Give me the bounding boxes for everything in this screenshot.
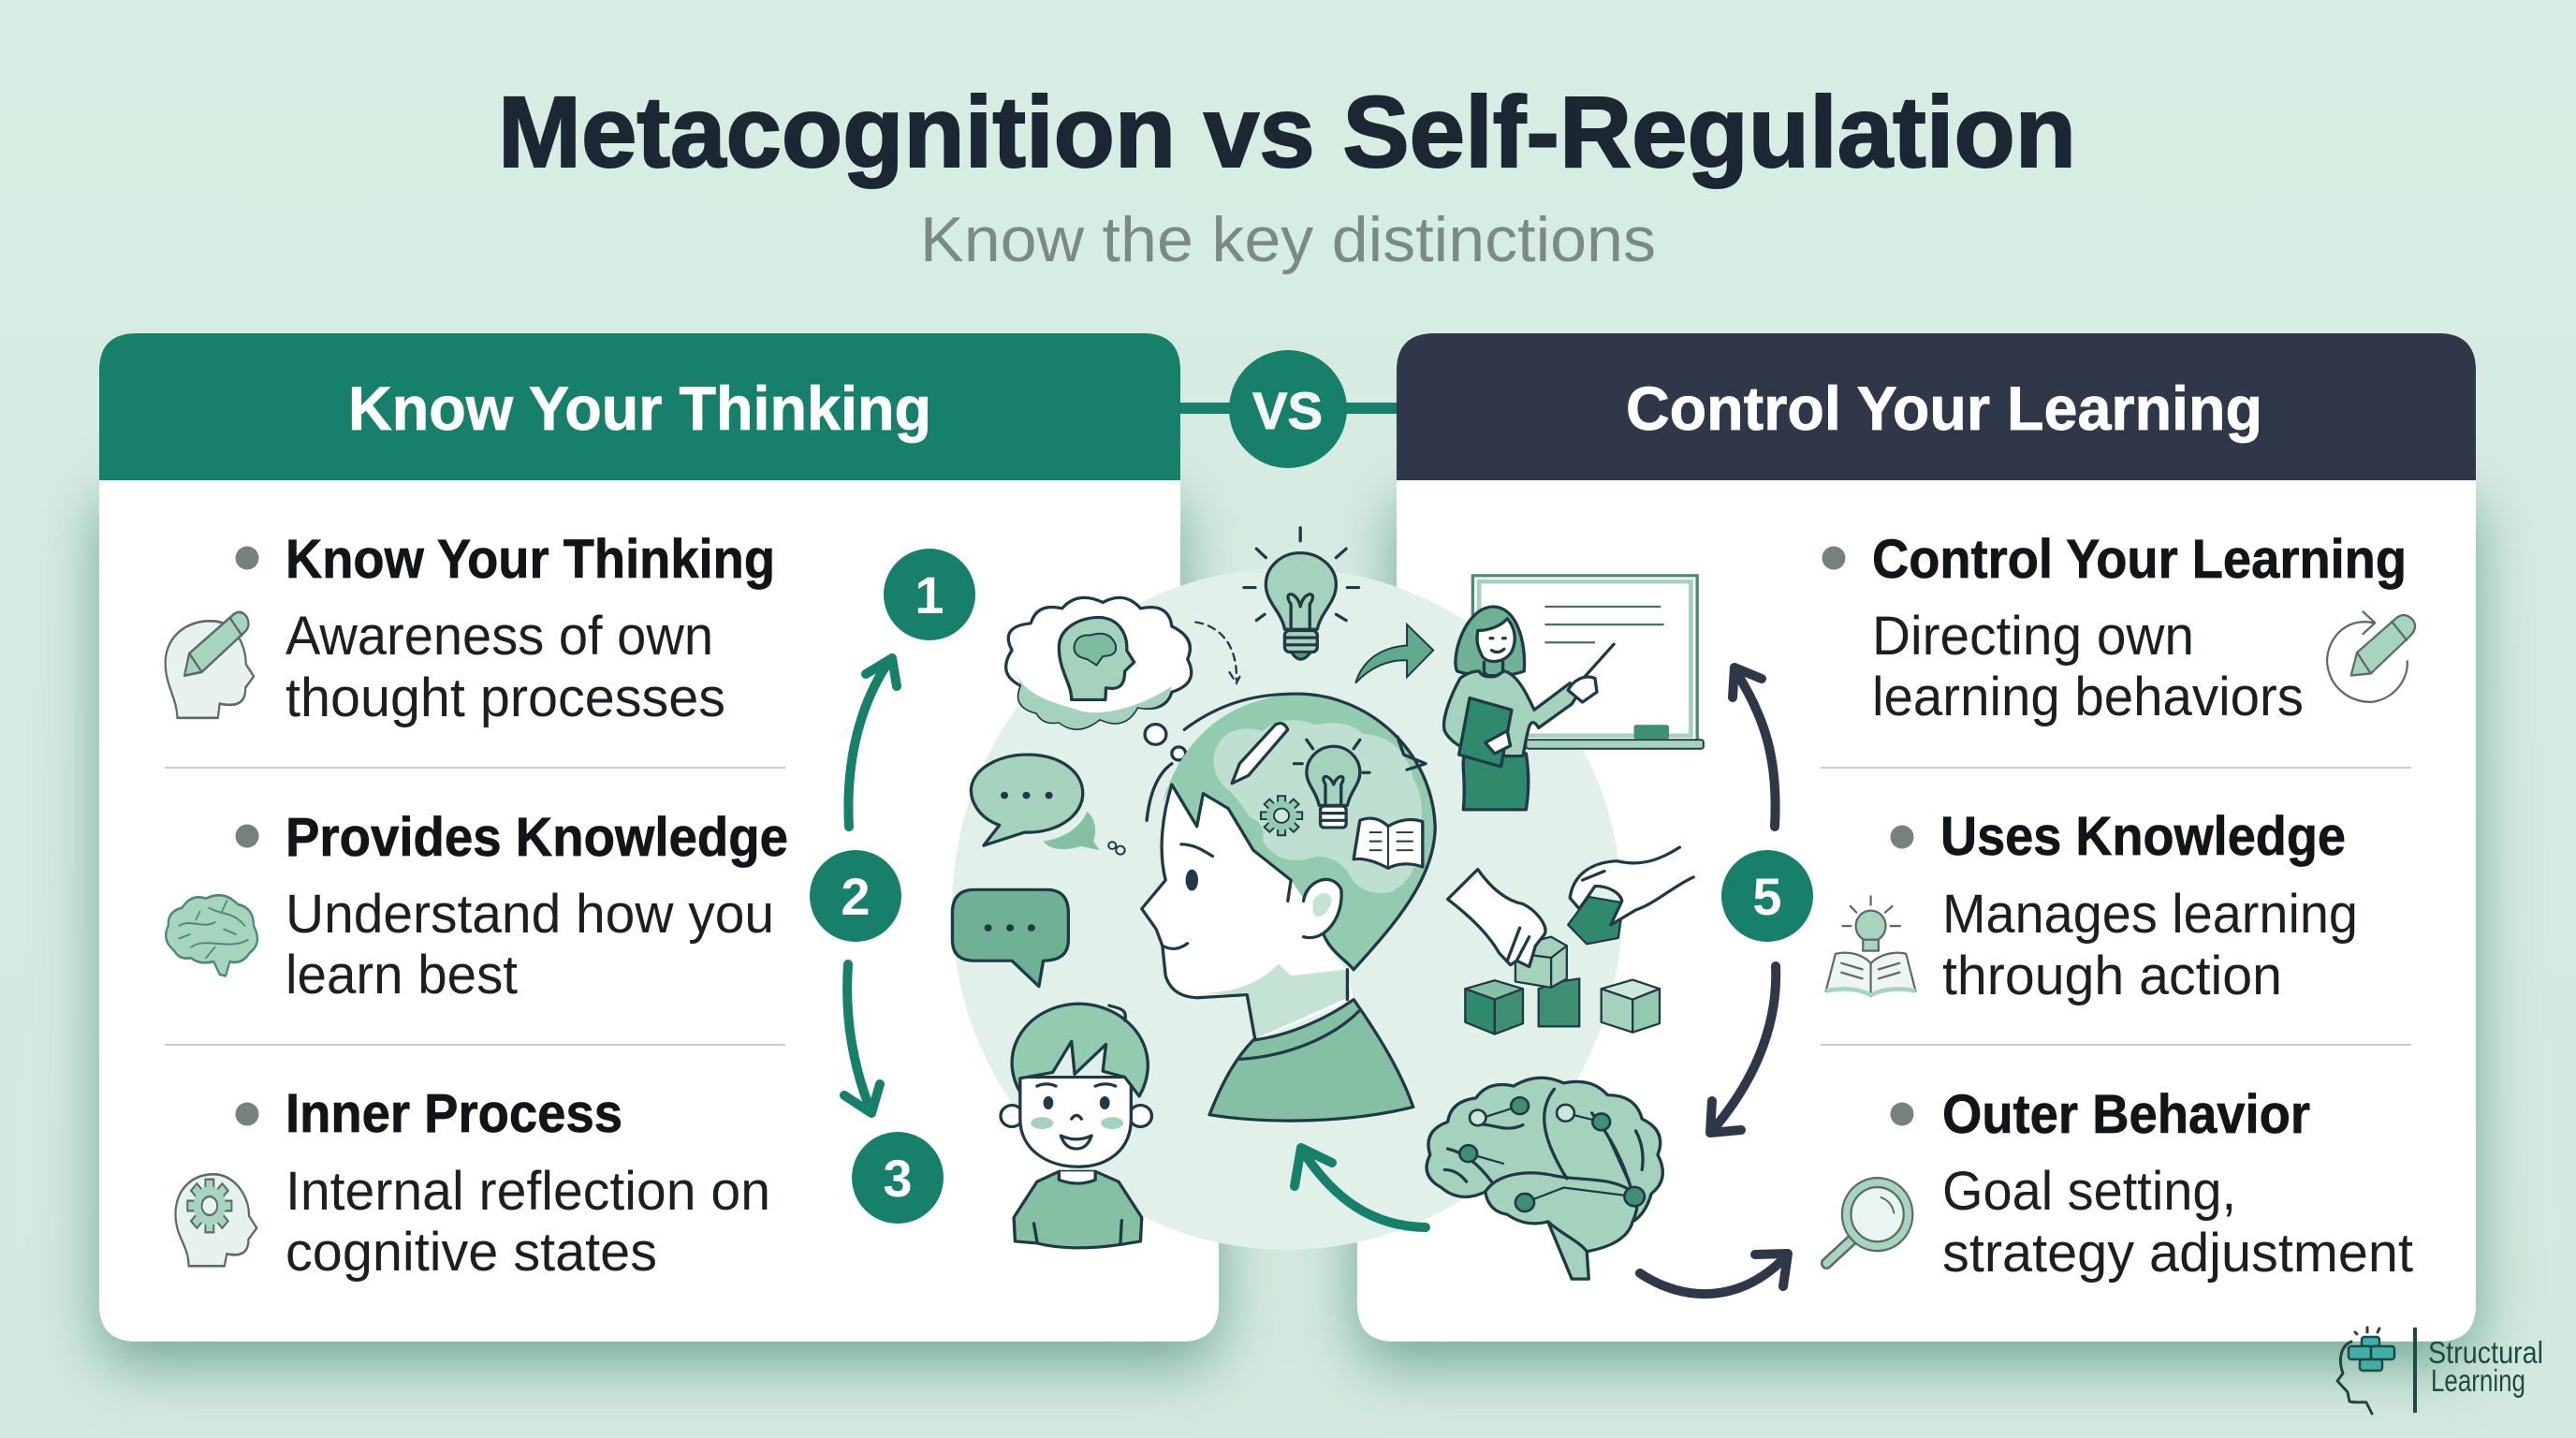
arrow: 2 to 1 [848, 658, 897, 827]
connected brain [1427, 1078, 1662, 1279]
badge 3 [852, 1132, 944, 1224]
speech bubble: upper [971, 755, 1125, 855]
icon: head with gear [175, 1174, 256, 1266]
blocks and hands [1448, 847, 1693, 1034]
right panel heading: Control Your Learning [1626, 374, 2262, 443]
arrow: 5 down [1710, 966, 1776, 1133]
arrow: brain to right [1640, 1254, 1788, 1294]
icon: top light bulb [1244, 528, 1358, 659]
logo head outline [2337, 1328, 2379, 1414]
shirt [1209, 1000, 1413, 1121]
icon: brain [166, 895, 257, 976]
right item 3: outer behavior [1826, 1084, 2413, 1284]
left item 3: inner process: Internal reflection on [285, 1161, 770, 1222]
left item 2: provides knowledge: learn best [285, 945, 518, 1005]
badge 1 [884, 549, 975, 640]
badge 5: 5 [1752, 867, 1782, 926]
logo: structural learning: Learning [2431, 1363, 2525, 1398]
left divider [165, 1044, 785, 1046]
right divider [1821, 767, 2411, 769]
logo: structural learning [2337, 1328, 2543, 1414]
central illustration [952, 528, 1704, 1279]
icon: magnifier [1826, 1178, 1912, 1263]
panel: control your learning [1357, 333, 2476, 1342]
right item 2: uses knowledge [1826, 806, 2358, 1006]
boy head [1142, 694, 1435, 1121]
title: Metacognition vs Self-Regulation [498, 75, 2076, 188]
central circle backdrop [952, 568, 1622, 1250]
panel: know your thinking [99, 333, 1219, 1342]
left item 2: provides knowledge [166, 807, 788, 1005]
icon: book in head [1354, 818, 1423, 868]
arrow: 2 to 3 [844, 964, 880, 1113]
badge 3: 3 [883, 1149, 913, 1208]
left item 1: know your thinking: Awareness of own [285, 606, 713, 667]
right item 2: uses knowledge: Manages learning [1942, 884, 2358, 945]
left item 3: inner process: Inner Process [285, 1083, 622, 1144]
left divider [165, 767, 785, 769]
badge 2 [810, 850, 901, 942]
dashed arrow [1195, 623, 1242, 683]
teacher at board [1444, 576, 1704, 810]
logo cross [2349, 1337, 2394, 1371]
right item 3: outer behavior: Outer Behavior [1942, 1084, 2310, 1145]
icon: pencil in head [1232, 724, 1288, 784]
arrow: brain to head [1295, 1148, 1426, 1227]
left item 3: inner process [175, 1083, 770, 1283]
left panel heading: Know Your Thinking [348, 374, 931, 443]
icon: cycle with pencil [2327, 611, 2415, 702]
badge 5 [1721, 850, 1813, 942]
badge 2: 2 [841, 867, 871, 926]
icon: bulb and book [1826, 896, 1915, 995]
subtitle: Know the key distinctions [920, 204, 1656, 275]
vs badge: VS [1252, 381, 1323, 440]
left item 2: provides knowledge: Understand how you [285, 884, 774, 945]
left item 1: know your thinking: thought processes [285, 668, 725, 728]
right item 2: uses knowledge: Uses Knowledge [1940, 806, 2346, 867]
arrow: 5 up [1733, 668, 1776, 827]
right item 3: outer behavior: Goal setting, [1942, 1161, 2236, 1222]
icon: gear in head [1261, 796, 1302, 835]
icon: head with pencil [166, 612, 254, 718]
left item 3: inner process: cognitive states [285, 1222, 657, 1283]
right item 2: uses knowledge: through action [1942, 946, 2282, 1006]
left item 1: know your thinking: Know Your Thinking [285, 529, 775, 590]
speech bubble: lower [952, 889, 1068, 987]
right divider [1821, 1044, 2411, 1046]
right item 1: control your learning: learning behaviors [1872, 667, 2304, 727]
right item 1: control your learning: Directing own [1872, 606, 2194, 667]
white patch restoring left panel edge under right shadow [1030, 936, 1219, 1342]
curved green arrow [1355, 624, 1433, 683]
right item 1: control your learning [1822, 529, 2415, 727]
child figure [1001, 1004, 1151, 1248]
speech dots [985, 924, 1035, 932]
thought cloud [1006, 597, 1192, 760]
left item 2: provides knowledge: Provides Knowledge [285, 807, 788, 868]
icon: bulb in head [1307, 746, 1360, 805]
number badges and cycle arrows [810, 549, 1813, 1294]
logo: structural learning: Structural [2428, 1335, 2543, 1370]
right item 1: control your learning: Control Your Learning [1872, 529, 2407, 590]
left item 1: know your thinking [166, 529, 775, 728]
badge 1: 1 [915, 565, 944, 624]
right item 3: outer behavior: strategy adjustment [1942, 1223, 2413, 1284]
vs badge [1180, 350, 1397, 468]
